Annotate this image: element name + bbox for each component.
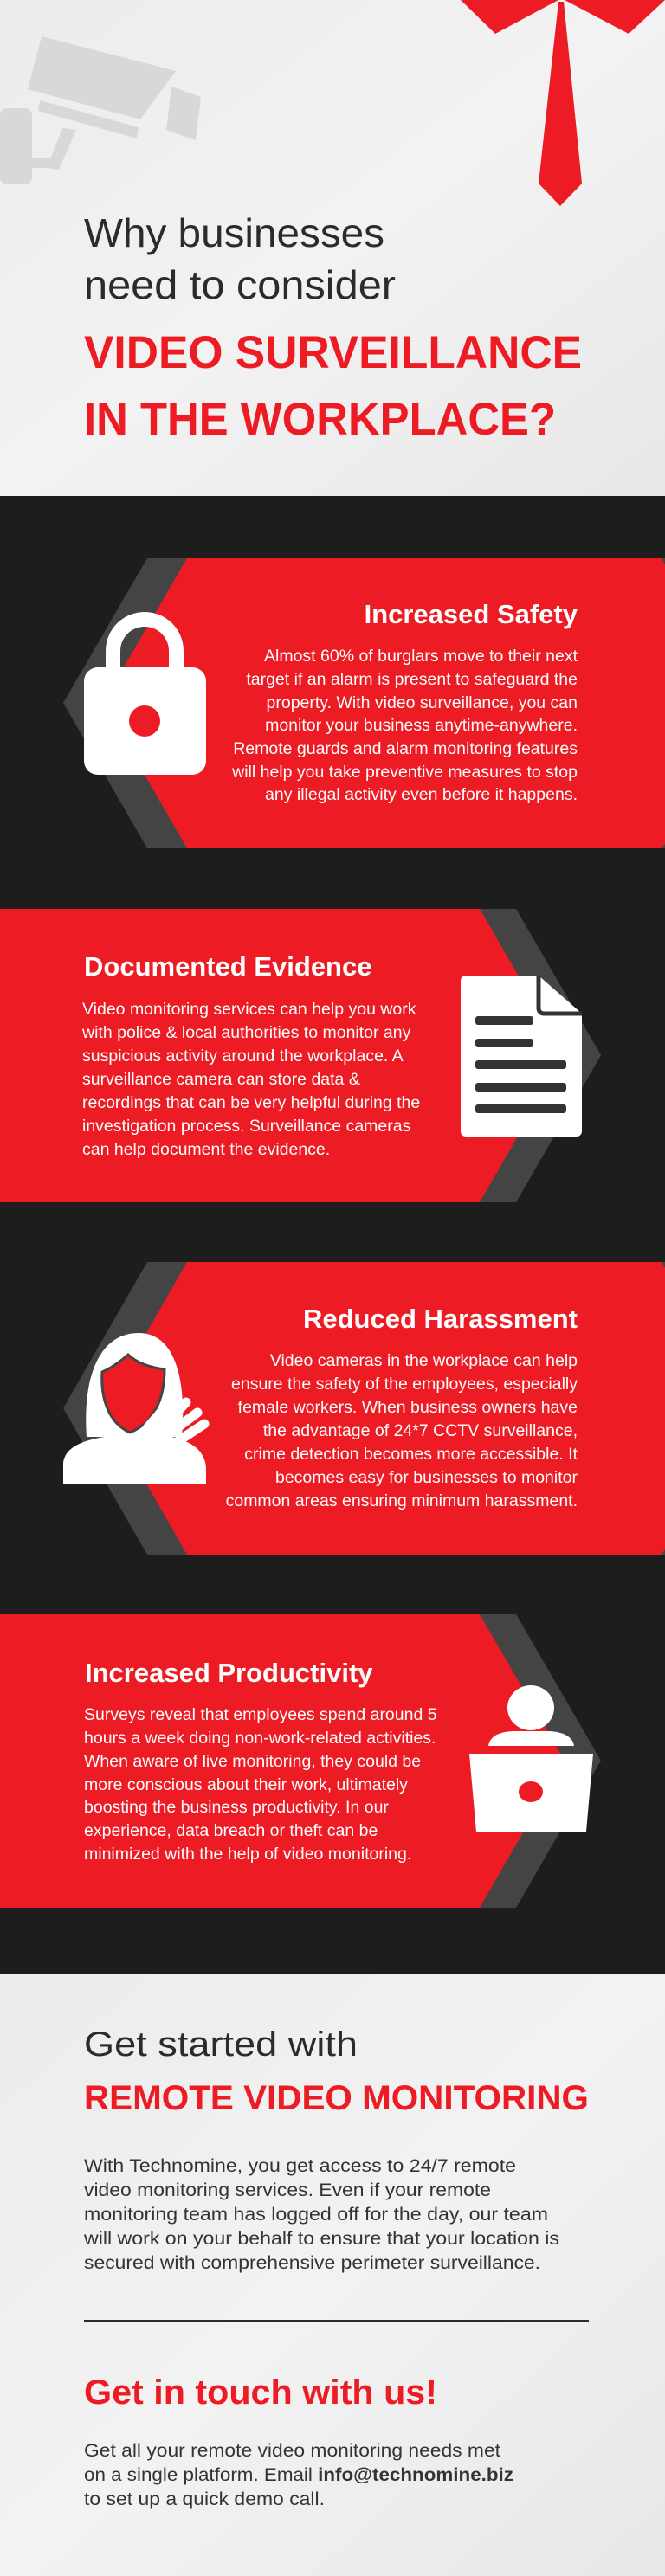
header background bbox=[0, 0, 665, 496]
title bbox=[84, 210, 582, 445]
text: contact body bbox=[84, 2441, 513, 2509]
icon: document bbox=[461, 976, 582, 1137]
text: safety body: Almost 60% of burglars move to their next bbox=[264, 647, 578, 666]
icon: person at laptop bbox=[469, 1685, 593, 1832]
title: Why businesses bbox=[84, 210, 384, 255]
text: safety body bbox=[231, 647, 578, 804]
text: safety body: target if an alarm is present to safeguard the bbox=[246, 670, 578, 689]
text: productivity body: more conscious about their work, ultimately bbox=[84, 1775, 408, 1794]
text: productivity body: minimized with the help of video monitoring. bbox=[84, 1845, 411, 1864]
text: contact body: to set up a quick demo call. bbox=[84, 2489, 325, 2509]
text: technomine body: With Technomine, you get access to 24/7 remote bbox=[84, 2156, 516, 2176]
heading: Documented Evidence: Documented Evidence bbox=[84, 951, 371, 982]
text: productivity body: Surveys reveal that employees spend around 5 bbox=[84, 1705, 437, 1724]
text: evidence body: with police & local authorities to monitor any bbox=[81, 1023, 411, 1042]
icon: woman with hand bbox=[63, 1333, 206, 1484]
panel: increased productivity bbox=[0, 1614, 601, 1908]
text: technomine body bbox=[83, 2156, 559, 2273]
text: productivity body: hours a week doing non-work-related activities. bbox=[84, 1729, 436, 1748]
text: evidence body: investigation process. Surveillance cameras bbox=[82, 1117, 411, 1136]
panel: reduced harassment bbox=[63, 1262, 665, 1555]
text: technomine body: will work on your behalf to ensure that your location is bbox=[83, 2229, 559, 2249]
text: harassment body bbox=[226, 1351, 578, 1510]
heading: get started: Get started with bbox=[84, 2025, 358, 2064]
text: safety body: property. With video surveillance, you can bbox=[267, 693, 578, 712]
dark background bbox=[0, 496, 665, 1974]
text: productivity body: When aware of live monitoring, they could be bbox=[84, 1752, 421, 1771]
text: safety body: will help you take preventive measures to stop bbox=[231, 763, 578, 782]
heading: get started: REMOTE VIDEO MONITORING bbox=[84, 2079, 589, 2117]
heading: Increased Productivity: Increased Productivity bbox=[85, 1658, 373, 1688]
panel: documented evidence bbox=[0, 909, 601, 1202]
text: technomine body: video monitoring services. Even if your remote bbox=[84, 2180, 491, 2200]
text: safety body: any illegal activity even before it happens. bbox=[265, 785, 578, 804]
text: harassment body: Video cameras in the workplace can help bbox=[270, 1351, 578, 1370]
title: IN THE WORKPLACE? bbox=[84, 394, 556, 445]
icon: red tie bbox=[461, 0, 665, 206]
icon: security camera bbox=[0, 36, 201, 184]
text: harassment body: female workers. When business owners have bbox=[238, 1398, 578, 1417]
text: evidence body: surveillance camera can store data & bbox=[82, 1070, 360, 1089]
text: evidence body: can help document the evidence. bbox=[82, 1140, 330, 1159]
text: productivity body bbox=[84, 1705, 437, 1864]
text: evidence body: Video monitoring services can help you work bbox=[82, 1000, 416, 1019]
heading: Increased Safety: Increased Safety bbox=[365, 599, 578, 629]
footer background bbox=[0, 1974, 665, 2576]
text: harassment body: the advantage of 24*7 CCTV surveillance, bbox=[263, 1421, 578, 1440]
text: harassment body: becomes easy for businesses to monitor bbox=[275, 1468, 578, 1487]
text: harassment body: common areas ensuring minimum harassment. bbox=[226, 1491, 578, 1510]
title: need to consider bbox=[84, 262, 396, 307]
text: evidence body bbox=[81, 1000, 420, 1159]
heading: get in touch: Get in touch with us! bbox=[84, 2373, 437, 2412]
text: productivity body: experience, data breach or theft can be bbox=[84, 1821, 378, 1840]
title: VIDEO SURVEILLANCE bbox=[84, 327, 582, 378]
text: evidence body: suspicious activity around the workplace. A bbox=[82, 1046, 404, 1066]
panel: increased safety bbox=[63, 558, 665, 848]
text: technomine body: secured with comprehensive perimeter surveillance. bbox=[84, 2253, 540, 2273]
text: harassment body: crime detection becomes more accessible. It bbox=[244, 1445, 578, 1464]
text: contact body: on a single platform. Email info@technomine.biz bbox=[84, 2465, 513, 2485]
text: productivity body: boosting the business productivity. In our bbox=[84, 1798, 389, 1817]
text: safety body: monitor your business anytime-anywhere. bbox=[265, 716, 578, 735]
text: technomine body: monitoring team has logged off for the day, our team bbox=[84, 2205, 548, 2225]
text: contact body: Get all your remote video monitoring needs met bbox=[84, 2441, 500, 2461]
text: evidence body: recordings that can be very helpful during the bbox=[82, 1093, 420, 1112]
text: harassment body: ensure the safety of the employees, especially bbox=[231, 1375, 578, 1394]
heading: Reduced Harassment: Reduced Harassment bbox=[303, 1304, 578, 1334]
heading: get started bbox=[84, 2025, 589, 2117]
icon: padlock bbox=[84, 612, 206, 775]
text: safety body: Remote guards and alarm monitoring features bbox=[233, 739, 578, 758]
